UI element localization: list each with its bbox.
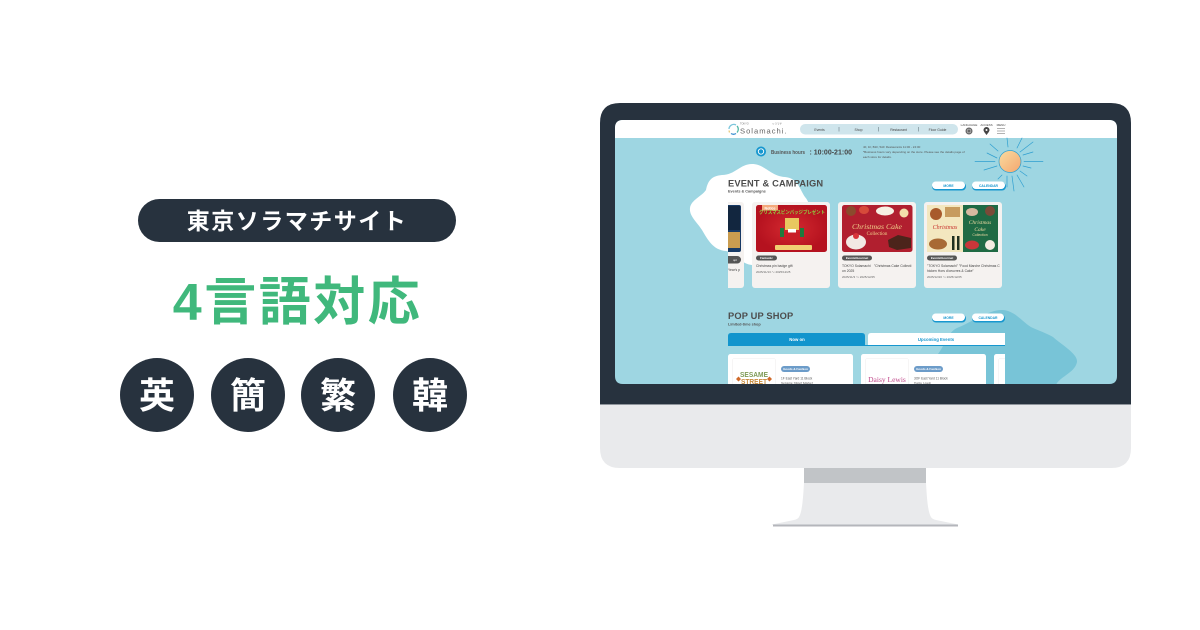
shop card: Daisy Lewis xyxy=(861,354,986,384)
card: partial: Year's p xyxy=(728,268,740,272)
card captions: hicken Hors d'oeuvres & Cake" xyxy=(927,269,975,273)
card: partial: opt xyxy=(733,258,737,262)
shop card: Daisy Lewis: 3OF East Yard 11 Block xyxy=(914,376,948,380)
section heading: pop up shop: Limited-time shop xyxy=(728,322,761,326)
badge: Simplified Chinese: 簡 xyxy=(230,375,266,416)
tabs: Now on xyxy=(789,337,805,342)
navigation bar: Restaurant xyxy=(890,128,907,132)
navigation bar: Shop xyxy=(855,128,863,132)
site label pill: 東京ソラマチサイト xyxy=(187,208,407,234)
header icons xyxy=(961,123,1005,135)
section heading: pop up shop: POP UP SHOP xyxy=(728,311,793,321)
card captions: 2025/11/13 ～ 2025/12/25 xyxy=(756,270,791,274)
card: Food Marche: Cake xyxy=(974,227,986,233)
pop up buttons: MORE xyxy=(943,316,954,320)
shop card: Sesame Street: Goods & Fashion xyxy=(783,367,808,371)
badge: English: 英 xyxy=(139,375,175,416)
decorative blob: blue xyxy=(938,310,1077,384)
site logo: ソラマチ xyxy=(772,122,783,126)
card captions: Christmas pin badge gift xyxy=(756,264,793,268)
monitor chin xyxy=(600,404,1131,468)
badge: Korean: 韓 xyxy=(412,375,448,416)
card: Food Marche: Christmas xyxy=(969,220,991,226)
header icons: LANGUAGE xyxy=(961,123,977,127)
card: Christmas pin badge xyxy=(752,202,830,288)
badge: Korean xyxy=(393,358,467,432)
shop card: Daisy Lewis: Goods & Fashion xyxy=(916,367,941,371)
navigation bar: Events xyxy=(814,128,825,132)
card captions xyxy=(756,256,1000,279)
business hours: : 10:00-21:00 xyxy=(810,150,852,156)
site logo: TOKYO xyxy=(740,122,749,126)
monitor stand xyxy=(772,468,958,526)
site logo xyxy=(728,122,786,135)
event buttons: MORE xyxy=(943,184,954,188)
business hours: each store for details. xyxy=(863,155,892,159)
card: Christmas cake collection: Collection xyxy=(867,232,888,237)
section heading: event and campaign: Events & Campaigns xyxy=(728,190,766,194)
sun illustration xyxy=(975,138,1043,191)
shop card: partial xyxy=(994,354,1005,384)
shop card: Sesame Street: SESAME xyxy=(740,372,768,379)
badge: Traditional Chinese xyxy=(301,358,375,432)
section heading: pop up shop xyxy=(728,312,793,326)
badge: Traditional Chinese: 繁 xyxy=(320,375,356,416)
navigation bar xyxy=(800,124,958,134)
monitor bezel xyxy=(600,103,1131,404)
site label pill xyxy=(138,199,456,242)
pop up buttons: CALENDAR xyxy=(978,316,998,320)
language badges xyxy=(120,358,467,432)
desktop monitor illustration xyxy=(600,103,1131,526)
card captions: on 2025 xyxy=(842,269,854,273)
business hours: 4F, 1F, B1F, 5AF Restaurants 11:00 - 24:00 xyxy=(863,145,921,149)
card: Christmas cake collection: Christmas Cake xyxy=(852,222,903,231)
card captions: 2025/11/3 ～ 2025/12/25 xyxy=(842,275,875,279)
tabs: Upcoming Events xyxy=(918,337,955,342)
shop card: Sesame Street: Sesame Street Market xyxy=(781,382,813,386)
pop up buttons xyxy=(932,314,1005,322)
card: partial xyxy=(728,202,744,288)
card captions: 2025/12/20 ～ 2025/12/25 xyxy=(927,275,962,279)
event buttons: CALENDAR xyxy=(979,184,999,188)
card: Food Marche: Collection xyxy=(972,233,988,237)
badge: Simplified Chinese xyxy=(211,358,285,432)
card captions: "TOKYO Solamachi" "Food Marche Christmas C xyxy=(927,264,1000,268)
event buttons xyxy=(932,182,1006,190)
shop card: Daisy Lewis: Daisy Lewis xyxy=(914,382,931,386)
header icons: MENU xyxy=(997,123,1005,127)
business hours xyxy=(756,146,965,158)
shop cards xyxy=(728,354,1005,384)
card: Food Marche xyxy=(924,202,1002,288)
shop card: Sesame Street: STREET xyxy=(741,377,767,386)
card: Christmas cake collection xyxy=(838,202,916,288)
card: Christmas pin badge: Notice xyxy=(765,206,775,210)
tabs xyxy=(728,333,1005,346)
shop card: Sesame Street: 1F East Yard 11 Block xyxy=(781,376,813,380)
screen: website xyxy=(615,120,1117,395)
business hours: *Business hours vary depending on the store. Please see the details page of xyxy=(863,150,965,154)
section heading: event and campaign xyxy=(728,180,822,194)
decorative blob: white xyxy=(690,164,811,265)
card: Christmas pin badge: クリスマスピンバッジプレゼント xyxy=(759,209,825,216)
header icons: ACCESS xyxy=(980,123,993,127)
site header xyxy=(615,120,1117,138)
card captions: Fantastic xyxy=(760,256,773,260)
site logo: Solamachi. xyxy=(740,126,788,136)
shop card: Daisy Lewis: Daisy Lewis xyxy=(868,375,906,384)
badge: English xyxy=(120,358,194,432)
section heading: event and campaign: EVENT & CAMPAIGN xyxy=(728,178,823,188)
event cards carousel xyxy=(700,202,1002,288)
card captions: Events/Gourmet xyxy=(846,256,868,260)
card captions: TOKYO Solamachi "Christmas Cake Collecti xyxy=(842,264,912,268)
shop card: Sesame Street xyxy=(728,354,853,384)
heading: 4 languages: 4言語対応 xyxy=(173,274,422,332)
card captions: Events/Gourmet xyxy=(931,256,953,260)
navigation bar: Floor Guide xyxy=(929,128,946,132)
card: Food Marche: Christmas xyxy=(933,225,958,231)
business hours: Business hours xyxy=(771,150,805,156)
